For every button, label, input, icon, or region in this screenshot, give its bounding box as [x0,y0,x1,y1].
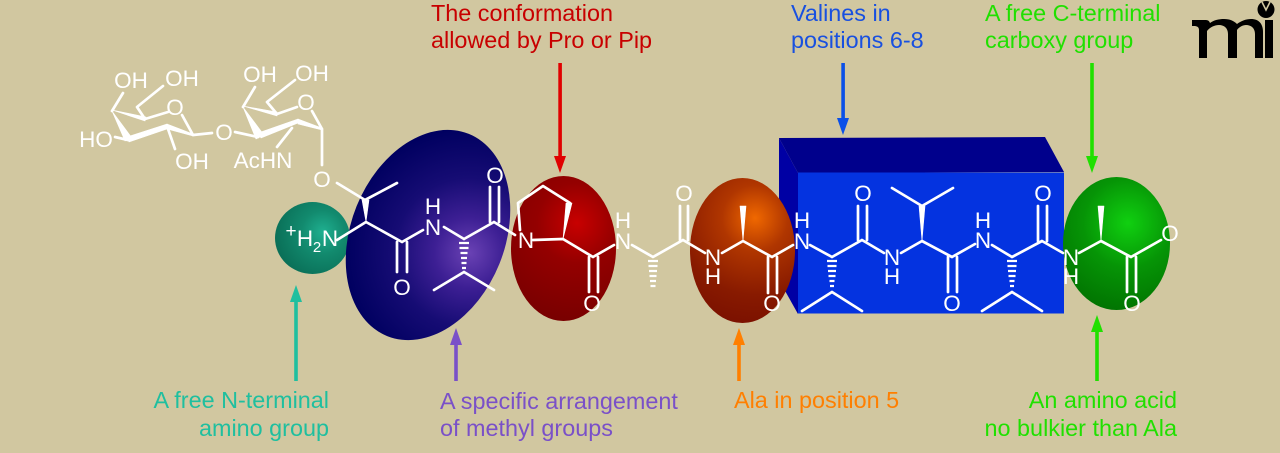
arrow: purple to methyl groups [450,328,462,381]
label: conformation: allowed by Pro or Pip [431,27,652,53]
residue 2: valine [425,163,515,290]
residue 6: valine: H [794,208,810,233]
residue 9: terminal alanine with carboxy group [1063,206,1179,316]
label: methyl groups: of methyl groups [440,415,613,441]
second sugar ring: AcHN [234,148,292,173]
residue 6: valine: O [854,181,872,206]
residue 9: terminal alanine with carboxy group: O [1161,221,1179,246]
label: amino acid size: no bulkier than Ala [985,415,1178,441]
residue 5: alanine: O [763,291,781,316]
residue 1: glycosylated threonine with free amino group: 2 [313,239,321,256]
residue 3: proline: N [518,228,534,253]
logo: mi [1192,1,1274,58]
residue 5: alanine: H [705,264,721,289]
residue 2: valine: N [425,215,441,240]
residue 1: glycosylated threonine with free amino group: + [285,221,297,242]
second sugar ring: OH [295,61,329,86]
residue 1: glycosylated threonine with free amino group: H [297,226,313,251]
residue 8: valine [975,181,1063,311]
first sugar ring: HO [79,127,113,152]
arrow: orange to Ala 5 [733,328,745,381]
label: C-terminal carboxy group: carboxy group [985,27,1133,53]
label: C-terminal carboxy group: A free C-terminal [985,0,1160,26]
highlight: red ellipsoid on Pro [511,176,616,321]
residue 3: proline: O [583,291,601,316]
residue 4: alanine: N [615,229,631,254]
arrow: green to carboxy group [1086,63,1098,173]
arrow: teal to amino group [290,285,302,381]
blue block: valines in positions 6-8 [779,137,1064,314]
arrow: red to proline [554,63,566,173]
label: valines: Valines in [791,0,891,26]
residue 7: valine: N [884,245,900,270]
residue 1: glycosylated threonine with free amino group: O [393,275,411,300]
residue 3: proline [518,186,614,316]
residue 4: alanine: H [615,208,631,233]
residue 6: valine [794,181,884,311]
highlight: teal sphere on amino group [275,202,350,274]
residue 7: valine [884,188,975,316]
residue 9: terminal alanine with carboxy group: H [1063,264,1079,289]
residue 8: valine: N [975,228,991,253]
disaccharide structure [79,61,365,200]
highlight: orange ellipsoid on Ala 5 [690,178,795,323]
residue 2: valine: H [425,194,441,219]
residue 4: alanine: O [675,181,693,206]
first sugar ring: O [215,120,233,145]
residue 1: glycosylated threonine with free amino group: N [322,226,338,251]
highlight: navy ellipsoid on methyl groups [316,105,540,365]
residue 4: alanine [615,181,705,286]
first sugar ring: OH [114,68,148,93]
residue 2: valine: O [486,163,504,188]
second sugar ring: O [313,167,331,192]
label: methyl groups: A specific arrangement [440,388,678,414]
first sugar ring [79,66,258,174]
label: valines: positions 6-8 [791,27,924,53]
label: Ala in position 5: Ala in position 5 [734,387,899,413]
label: N-terminal amino group: amino group [199,415,329,441]
second sugar ring: OH [243,62,277,87]
residue 9: terminal alanine with carboxy group: N [1063,245,1079,270]
second sugar ring [234,61,365,200]
first sugar ring: O [166,95,184,120]
arrow: green to terminal residue [1091,315,1103,381]
first sugar ring: OH [175,149,209,174]
label: N-terminal amino group: A free N-terminal [154,387,329,413]
residue 5: alanine: N [705,245,721,270]
residue 8: valine: O [1034,181,1052,206]
residue 8: valine: H [975,208,991,233]
second sugar ring: O [297,90,315,115]
label: conformation: The conformation [431,0,613,26]
highlight: green ellipsoid on terminal residue [1063,177,1170,310]
residue 9: terminal alanine with carboxy group: O [1123,291,1141,316]
residue 5: alanine [705,206,793,316]
residue 7: valine: H [884,264,900,289]
first sugar ring: OH [165,66,199,91]
peptide backbone [285,163,1179,316]
residue 1: glycosylated threonine with free amino group [285,183,423,300]
residue 6: valine: N [794,229,810,254]
residue 7: valine: O [943,291,961,316]
arrow: blue to valines [837,63,849,135]
label: amino acid size: An amino acid [1029,387,1177,413]
